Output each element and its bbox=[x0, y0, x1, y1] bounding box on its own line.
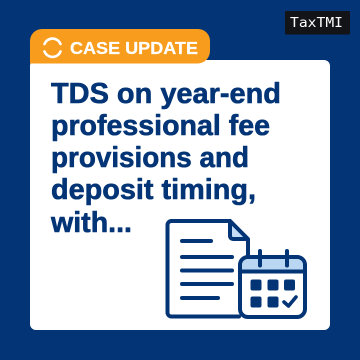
icon: document bbox=[167, 221, 248, 316]
heading: deposit timing, bbox=[51, 174, 256, 206]
panel: white card bbox=[30, 60, 330, 330]
icon: refresh ring bbox=[44, 39, 60, 57]
badge label: CASE UPDATE bbox=[70, 38, 198, 58]
watermark: TaxTMI bbox=[285, 11, 350, 34]
heading: TDS on year-end bbox=[51, 78, 281, 110]
heading bbox=[50, 78, 281, 239]
heading: provisions and bbox=[51, 142, 249, 174]
icon: calendar bbox=[240, 251, 305, 317]
heading: professional fee bbox=[51, 110, 270, 142]
heading: with... bbox=[50, 207, 132, 239]
watermark: TaxTMI: TaxTMI bbox=[290, 15, 343, 31]
badge: case update bbox=[30, 29, 210, 64]
